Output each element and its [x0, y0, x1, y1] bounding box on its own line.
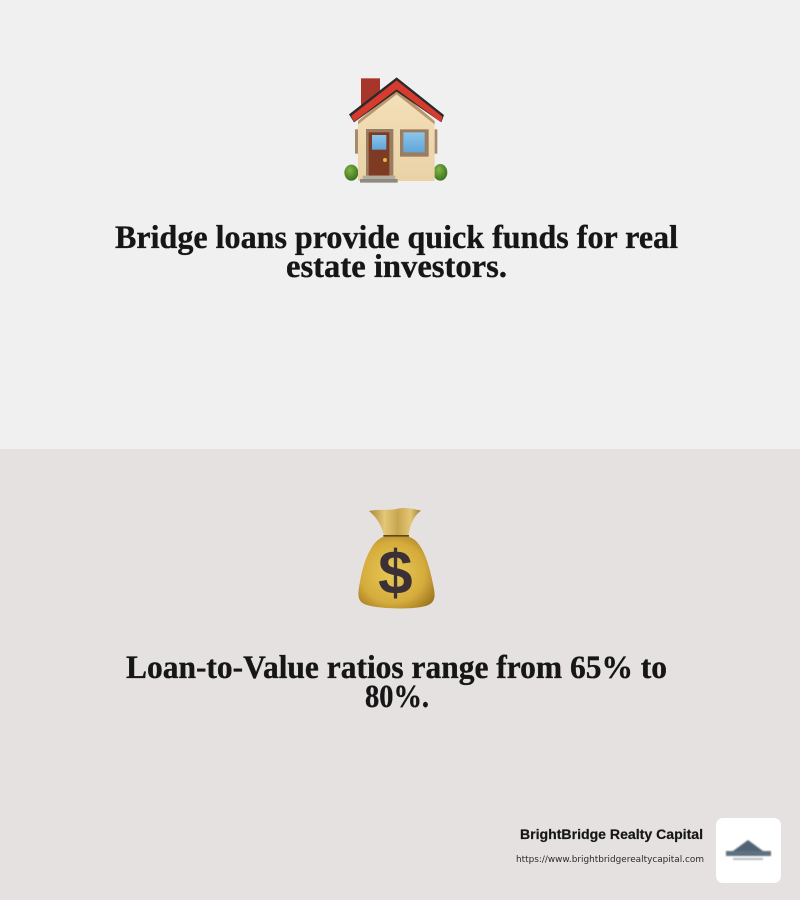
panel: loan-to-value — [0, 449, 800, 900]
heading: bridge loans — [115, 220, 678, 285]
icon: house — [344, 77, 447, 183]
icon: money bag: $ — [378, 539, 413, 608]
heading: bridge loans: estate investors. — [286, 249, 507, 285]
icon: money bag — [358, 508, 435, 608]
panel: bridge loans — [0, 0, 800, 449]
heading: loan-to-value: Loan-to-Value ratios range from 65% to — [126, 650, 667, 686]
footer: brand — [516, 818, 781, 883]
heading: loan-to-value — [126, 650, 667, 715]
logo tile — [716, 818, 781, 883]
heading: bridge loans: Bridge loans provide quick funds for real — [115, 220, 678, 256]
brand url: https://www.brightbridgerealtycapital.com — [516, 855, 704, 865]
heading: loan-to-value: 80%. — [365, 679, 429, 715]
brand name: BrightBridge Realty Capital — [520, 827, 703, 842]
